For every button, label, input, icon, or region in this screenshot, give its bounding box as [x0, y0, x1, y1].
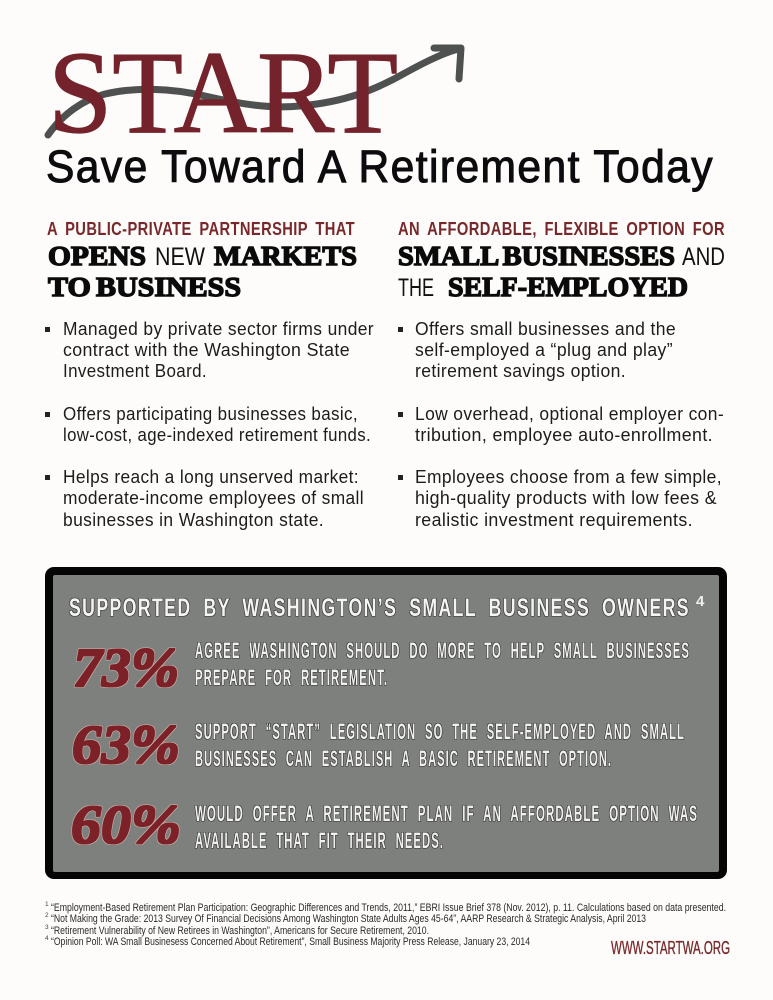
heading: opens new markets to business: NEW — [155, 243, 205, 271]
heading: small businesses and the self-employed: AND — [682, 243, 725, 271]
footnotes: 2 — [45, 912, 49, 919]
heading: small businesses and the self-employed: SELF-EMPLOYED — [448, 272, 688, 302]
text block: right bullet list: retirement savings option. — [415, 361, 626, 381]
heading: small businesses and the self-employed — [398, 241, 725, 302]
text block: right bullet list: realistic investment requirements. — [415, 510, 693, 530]
text block: left bullet list: Offers participating businesses basic, — [63, 404, 358, 424]
heading: small businesses and the self-employed: SMALL BUSINESSES — [398, 241, 675, 271]
text block: left bullet list — [45, 319, 374, 530]
text block: right bullet list: Employees choose from a few simple, — [415, 467, 722, 487]
heading: small businesses and the self-employed: THE — [398, 274, 434, 302]
logo: START with rising arrow — [48, 27, 461, 158]
text block: right bullet list: Offers small businesses and the — [415, 319, 676, 339]
panel heading: 4 — [696, 593, 705, 610]
text block: right bullet list: self-employed a “plug and play” — [415, 340, 673, 360]
text block: left bullet list: Helps reach a long unserved market: — [63, 467, 359, 487]
stat: 63%: 63% — [72, 714, 180, 775]
text block: left bullet list: Investment Board. — [63, 361, 207, 381]
text block: left bullet list: businesses in Washington state. — [63, 510, 324, 530]
heading: public-private partnership: A PUBLIC-PRIVATE PARTNERSHIP THAT — [47, 218, 355, 239]
stat: 73%: 73% — [73, 637, 179, 698]
footnotes: “Opinion Poll: WA Small Businesess Concerned About Retirement”, Small Business Majority Press Release, January 23, 2014 — [51, 936, 530, 948]
text block: right bullet list: Low overhead, optional employer con- — [415, 404, 724, 424]
panel: left heading — [47, 218, 357, 302]
text block: right bullet list — [398, 319, 724, 530]
panel: supported by small business owners — [45, 567, 727, 879]
subtitle: Save Toward A Retirement Today — [46, 141, 714, 192]
text block: left bullet list: contract with the Washington State — [63, 340, 350, 360]
footnotes: 1 — [45, 901, 49, 908]
stat: 73%: PREPARE FOR RETIREMENT. — [195, 665, 388, 690]
text block: right bullet list: tribution, employee auto-enrollment. — [415, 425, 713, 445]
text block: right bullet list: high-quality products with low fees & — [415, 488, 717, 508]
footnotes: 3 — [45, 924, 49, 931]
stat: 60%: 60% — [71, 794, 181, 855]
stat: 60% — [71, 794, 698, 855]
icon: rising arrow — [48, 48, 461, 135]
stat: 73% — [73, 637, 690, 698]
heading: opens new markets to business: OPENS — [48, 241, 146, 271]
footnotes: 4 — [45, 935, 49, 942]
heading: opens new markets to business: MARKETS — [214, 241, 357, 271]
text block: left bullet list: moderate-income employees of small — [63, 488, 364, 508]
text block: left bullet list: Managed by private sector firms under — [63, 319, 374, 339]
stat: 63% — [72, 714, 685, 775]
stat: 60%: AVAILABLE THAT FIT THEIR NEEDS. — [195, 828, 444, 853]
text block: left bullet list: low-cost, age-indexed retirement funds. — [63, 425, 371, 445]
footnotes — [45, 901, 726, 948]
footnotes: “Not Making the Grade: 2013 Survey Of Financial Decisions Among Washington State Adults Ages 45-64”, AARP Research & Strategic Analysis, April 2013 — [51, 913, 646, 925]
heading: opens new markets to business: TO BUSINESS — [48, 272, 241, 302]
heading: opens new markets to business — [48, 241, 357, 302]
panel: right heading — [398, 218, 725, 302]
title: START: START — [48, 27, 398, 158]
footnotes: “Retirement Vulnerability of New Retirees in Washington”, Americans for Secure Retirement, 2010. — [51, 925, 429, 937]
